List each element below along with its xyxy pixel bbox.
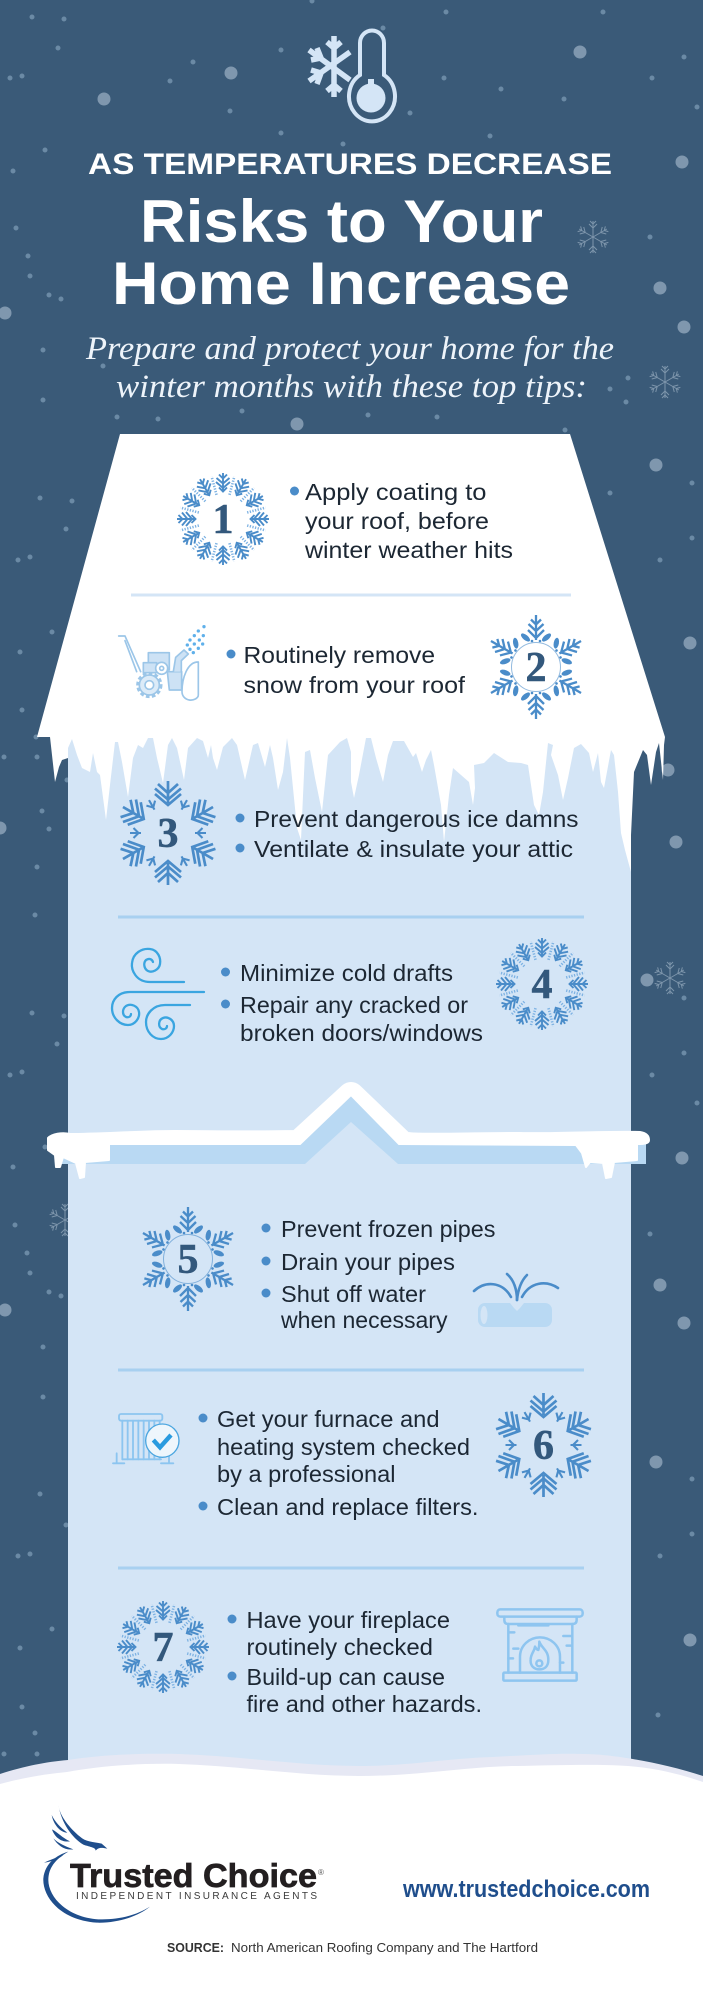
- logo: Trusted Choice: [43, 1805, 324, 1923]
- bullet text: your roof, before: [305, 508, 489, 534]
- bullet text: [226, 642, 466, 698]
- title: AS TEMPERATURES DECREASE: [88, 148, 612, 181]
- bullet text: [236, 806, 578, 862]
- bullet text: [198, 1406, 478, 1520]
- bullet text: [221, 960, 483, 1046]
- snowflake number 1: [177, 473, 269, 565]
- bullet text: fire and other hazards.: [246, 1691, 482, 1717]
- bullet text: Shut off water: [281, 1281, 426, 1307]
- bullet text: Ventilate & insulate your attic: [254, 836, 573, 862]
- tip 2: remove snow: [119, 615, 589, 719]
- tip 7: fireplace: [117, 1601, 583, 1717]
- snowflake number 6: 6: [533, 1423, 554, 1469]
- subtitle: winter months with these top tips:: [116, 369, 587, 405]
- snowflake number 7: [117, 1601, 209, 1693]
- bullet text: Get your furnace and: [217, 1406, 440, 1432]
- snowflake number 2: 2: [526, 645, 546, 691]
- icon: snowflake and thermometer: [309, 30, 395, 121]
- bullet text: Prevent dangerous ice damns: [254, 806, 578, 832]
- subtitle: [85, 331, 614, 405]
- logo eagle and swoosh: [43, 1805, 150, 1923]
- bullet text: Repair any cracked or: [240, 992, 468, 1018]
- snowflake number 5: 5: [178, 1237, 198, 1283]
- source: SOURCE:: [167, 1940, 224, 1955]
- bullet text: [290, 479, 513, 563]
- bullet text: heating system checked: [217, 1434, 470, 1460]
- bullet text: Apply coating to: [305, 479, 486, 505]
- bullet text: when necessary: [280, 1307, 448, 1333]
- tip 6: furnace: [113, 1393, 600, 1520]
- tip 3: ice damns: [111, 781, 578, 885]
- bullet text: winter weather hits: [304, 537, 513, 563]
- snowflake number 2: [483, 615, 589, 719]
- mid-house roofline with snow: [48, 1083, 649, 1178]
- logo registered mark: ®: [318, 1868, 324, 1877]
- icon: wind: [112, 949, 204, 1039]
- title: Risks to Your: [140, 188, 543, 255]
- icon: fireplace: [497, 1609, 583, 1681]
- bullet text: Clean and replace filters.: [217, 1494, 478, 1520]
- icon: burst pipe: [474, 1274, 558, 1327]
- bullet text: Minimize cold drafts: [240, 960, 453, 986]
- bullet text: routinely checked: [246, 1634, 433, 1660]
- bullet text: Have your fireplace: [246, 1607, 450, 1633]
- bullet text: Routinely remove: [244, 642, 435, 668]
- snowflake number 1: 1: [212, 497, 234, 543]
- tip 1: roof coating: [177, 473, 513, 565]
- bullet text: Build-up can cause: [246, 1664, 445, 1690]
- snowflake number 7: 7: [152, 1625, 174, 1671]
- website: www.trustedchoice.com: [402, 1876, 650, 1903]
- bullet text: by a professional: [217, 1461, 396, 1487]
- bullet text: broken doors/windows: [240, 1020, 483, 1046]
- snowflake number 6: [487, 1393, 600, 1497]
- logo wordmark: Trusted Choice: [70, 1857, 317, 1894]
- source: North American Roofing Company and The Hartford: [231, 1940, 538, 1955]
- bullet text: [262, 1216, 496, 1333]
- title: Home Increase: [112, 250, 570, 317]
- snowflake number 4: [496, 938, 588, 1030]
- snowflake number 3: [111, 781, 225, 885]
- logo tagline: INDEPENDENT INSURANCE AGENTS: [76, 1891, 317, 1902]
- snowflake number 4: 4: [532, 962, 552, 1008]
- tip 4: cold drafts: [112, 938, 588, 1046]
- icon: snow blower: [119, 625, 206, 700]
- bullet text: snow from your roof: [244, 672, 466, 698]
- snowflake number 5: [135, 1207, 241, 1311]
- bullet text: Drain your pipes: [281, 1249, 455, 1275]
- icon: radiator with check mark: [113, 1414, 179, 1463]
- subtitle: Prepare and protect your home for the: [85, 331, 614, 367]
- snow-covered roof with icicles: [37, 434, 665, 872]
- house body: [68, 737, 631, 1767]
- snow drift footer: [0, 1754, 703, 2000]
- title: [88, 148, 612, 317]
- tip 5: frozen pipes: [135, 1207, 558, 1333]
- bullet text: Prevent frozen pipes: [281, 1216, 496, 1242]
- snowflake number 3: 3: [158, 811, 178, 857]
- bullet text: [228, 1607, 482, 1717]
